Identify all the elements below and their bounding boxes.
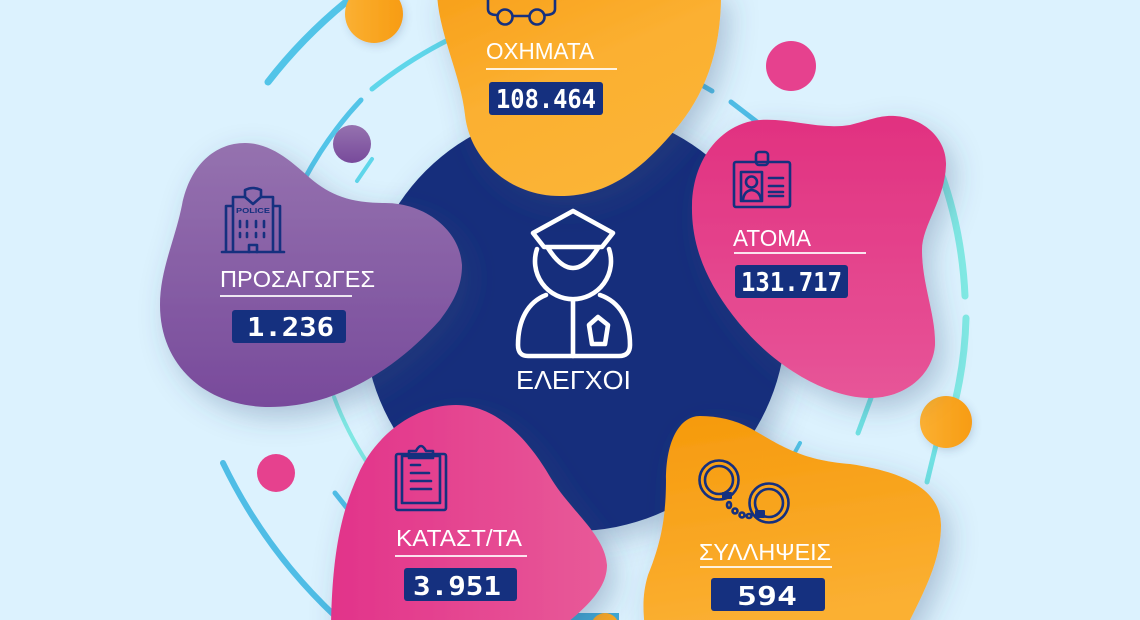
value: detentions: 1.236	[247, 313, 334, 343]
label: vehicles: ΟΧΗΜΑΤΑ	[486, 38, 595, 64]
panel: establishments	[331, 405, 607, 620]
dot: purple	[333, 125, 371, 163]
dashed orbit arcs	[223, 2, 966, 620]
dot: pink top right	[766, 41, 816, 91]
dot: pink left	[257, 454, 295, 492]
value: arrests: 594	[737, 582, 797, 612]
label: persons: ΑΤΟΜΑ	[733, 225, 812, 251]
label: establishments: ΚΑΤΑΣΤ/ΤΑ	[396, 525, 523, 551]
value: establishments: 3.951	[413, 572, 501, 602]
label: detentions: ΠΡΟΣΑΓΩΓΕΣ	[220, 266, 375, 292]
value: detentions	[232, 310, 346, 343]
panel: persons	[692, 116, 946, 398]
icon: police officer	[518, 211, 630, 356]
icon: clipboard	[396, 446, 446, 510]
value: persons: 131.717	[741, 268, 842, 298]
dot: orange bottom	[591, 613, 619, 620]
value: vehicles: 108.464	[496, 85, 596, 115]
value: arrests	[711, 578, 825, 612]
dot: orange right	[920, 396, 972, 448]
panel: vehicles	[437, 0, 721, 196]
icon: car	[488, 0, 555, 24]
panel: arrests	[643, 416, 941, 620]
icon: id card	[734, 152, 790, 207]
value: establishments	[404, 568, 517, 602]
icon: handcuffs	[700, 460, 788, 522]
panel: detentions	[160, 143, 462, 407]
circle: navy centre	[364, 109, 786, 531]
label: arrests: ΣΥΛΛΗΨΕΙΣ	[699, 539, 831, 565]
label: centre title: ΕΛΕΓΧΟΙ	[516, 365, 631, 395]
icon: police station: POLICE	[236, 206, 270, 215]
dot: orange top	[345, 0, 403, 43]
icon: police station	[222, 188, 284, 252]
